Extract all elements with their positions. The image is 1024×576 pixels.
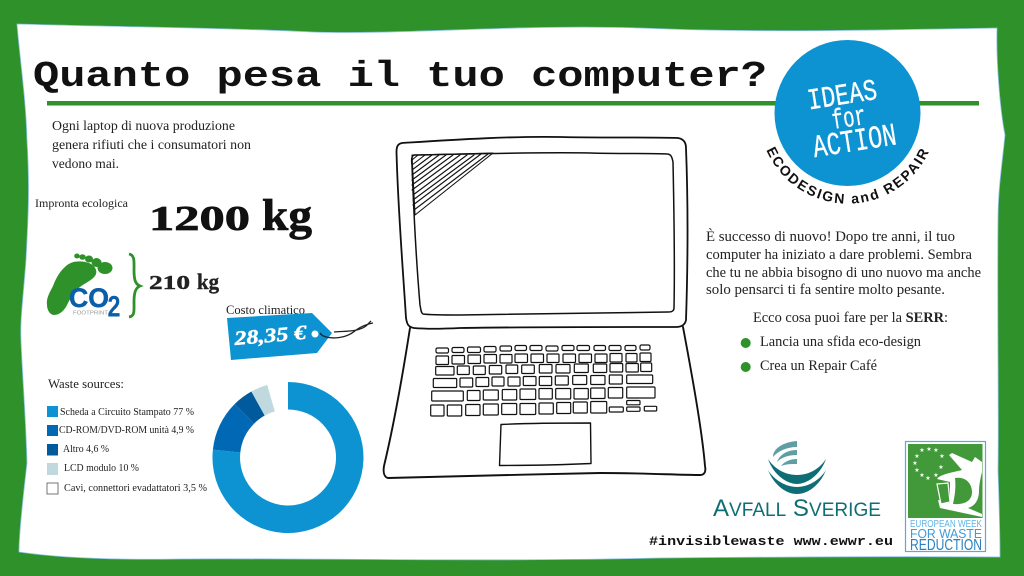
body text: che tu ne abbia bisogno di uno nuovo ma anche — [706, 265, 981, 281]
title: Quanto pesa il tuo computer? — [33, 56, 767, 97]
logo: european week for waste reduction: FOR WASTE — [910, 526, 982, 541]
intro text: genera rifiuti che i consumatori non — [52, 138, 251, 153]
legend item: cavi: Cavi, connettori evadattatori 3,5 % — [64, 483, 207, 494]
laptop illustration — [384, 137, 705, 478]
number: 210 kg — [149, 269, 219, 294]
laptop screen — [412, 153, 674, 315]
brace — [129, 254, 140, 317]
action list — [741, 334, 922, 374]
badge: ideas for action: for — [830, 102, 868, 138]
logo: european week for waste reduction: ★ — [939, 453, 945, 460]
legend item: LCD: LCD modulo 10 % — [64, 463, 139, 474]
badge: ideas for action — [766, 40, 929, 204]
legend item: scheda a circuito stampato: Scheda a Circuito Stampato 77 % — [60, 407, 194, 418]
legend: waste sources — [47, 377, 207, 494]
big number: 1200 kg: kg — [262, 191, 312, 240]
logo: european week for waste reduction: EUROPEAN WEEK — [910, 519, 982, 530]
logo: european week for waste reduction — [906, 442, 986, 554]
number: 210 kg: 210 — [149, 272, 190, 294]
icon: CO2 footprint: CO — [69, 283, 109, 313]
logo: european week for waste reduction: ★ — [926, 446, 932, 453]
intro text — [52, 119, 251, 172]
legend: waste sources: Waste sources: — [48, 377, 124, 391]
legend item: CD-ROM: CD-ROM/DVD-ROM unità 4,9 % — [59, 425, 194, 436]
logo: european week for waste reduction: ★ — [919, 447, 925, 454]
title rule — [47, 101, 979, 106]
logo: european week for waste reduction: REDUCTION — [910, 537, 982, 554]
legend item: altro — [47, 444, 109, 456]
laptop lid — [396, 137, 688, 329]
action list: Lancia una sfida eco-design — [760, 334, 922, 350]
logo: european week for waste reduction: ★ — [933, 447, 939, 454]
logo: european week for waste reduction: ★ — [914, 453, 920, 460]
body text: computer ha iniziato a dare problemi. Sembra — [706, 247, 973, 263]
trackpad — [500, 423, 591, 466]
intro text: Ogni laptop di nuova produzione — [52, 119, 235, 134]
logo: european week for waste reduction: ★ — [938, 464, 944, 471]
icon: CO2 footprint: FOOTPRINT — [73, 310, 109, 316]
donut chart — [212, 382, 363, 533]
laptop base — [384, 327, 705, 478]
icon: CO2 footprint: 2 — [108, 290, 120, 324]
big number: 1200 kg — [149, 191, 312, 240]
logo: avfall sverige — [713, 441, 881, 522]
number: 210 kg: kg — [197, 269, 219, 294]
keyboard — [431, 345, 657, 416]
footer hashtag and url: #invisiblewaste www.ewwr.eu — [649, 534, 893, 549]
legend item: altro: Altro 4,6 % — [63, 444, 109, 455]
body text: solo pensarci ti fa sentire molto pesante. — [706, 282, 945, 298]
screen hatching — [412, 153, 493, 215]
logo: european week for waste reduction: ★ — [933, 472, 939, 479]
big number: 1200 kg: 1200 — [149, 199, 250, 238]
logo: european week for waste reduction: ★ — [912, 460, 918, 467]
logo: european week for waste reduction: ★ — [914, 467, 920, 474]
logo: european week for waste reduction: ★ — [925, 475, 931, 482]
label: costo climatico: Costo climatico — [226, 303, 305, 317]
badge: ideas for action: ACTION — [810, 117, 899, 167]
logo: avfall sverige: AVFALL SVERIGE — [713, 495, 881, 522]
badge: ideas for action: ECODESIGN and REPAIR — [766, 146, 929, 204]
price tag — [227, 313, 373, 360]
price tag: 28,35 € — [232, 322, 308, 350]
action list: Crea un Repair Café — [760, 358, 877, 374]
body text — [706, 228, 981, 298]
icon: CO2 footprint — [47, 254, 120, 324]
body text: È successo di nuovo! Dopo tre anni, il tuo — [706, 228, 955, 245]
action heading: Ecco cosa puoi fare per la SERR: — [753, 310, 948, 326]
logo: european week for waste reduction: ★ — [919, 472, 925, 479]
label: impronta ecologica: Impronta ecologica — [35, 196, 129, 210]
intro text: vedono mai. — [52, 157, 119, 172]
badge: ideas for action: IDEAS — [805, 75, 880, 119]
